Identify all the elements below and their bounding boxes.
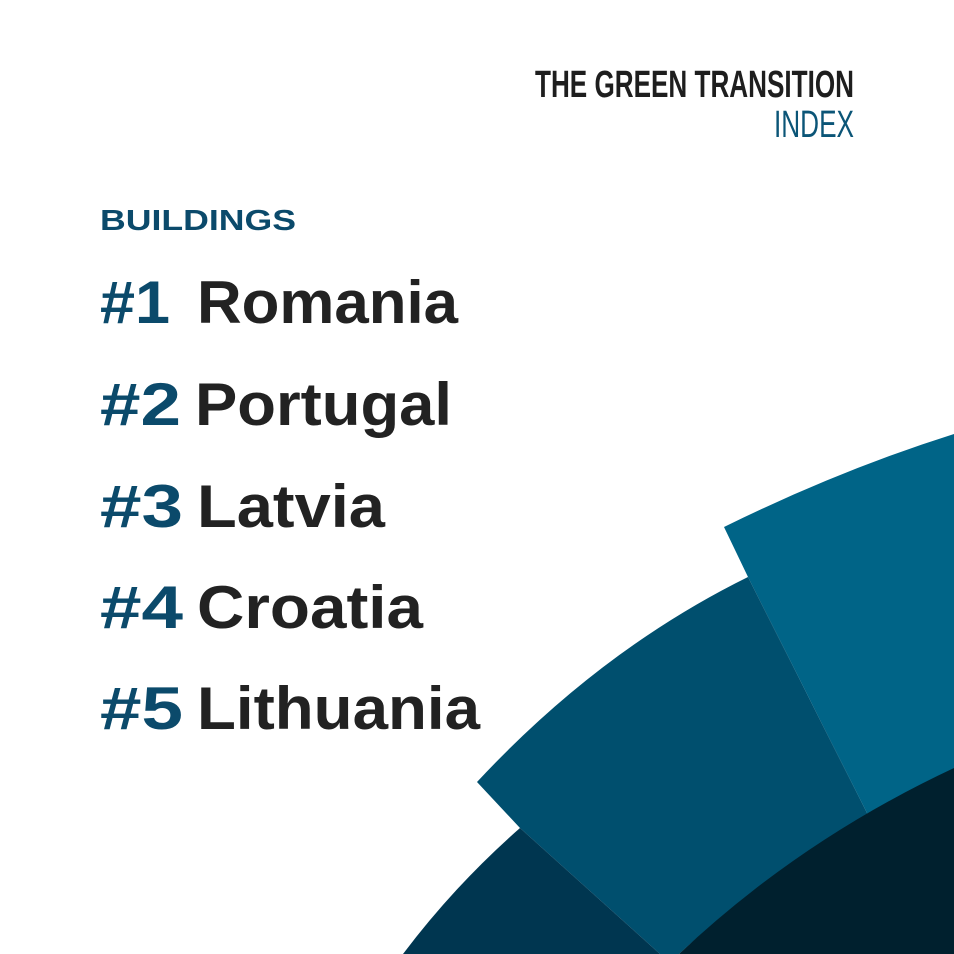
- rank 5: #5: [100, 675, 183, 742]
- heading: buildings: BUILDINGS: [100, 205, 296, 237]
- rank 3: #3: [100, 473, 183, 540]
- rank 4: #4: [100, 574, 184, 641]
- rank 5: Lithuania: [197, 675, 481, 742]
- rank 4: [100, 574, 424, 641]
- title: INDEX: [774, 104, 854, 146]
- ranking list: [100, 269, 481, 742]
- rank 2: [100, 371, 452, 438]
- rank 2: #2: [100, 371, 181, 438]
- arc segment: darkest: [679, 768, 954, 954]
- decorative arc segments: [403, 434, 954, 954]
- title: [535, 64, 854, 146]
- rank 1: #1: [100, 269, 170, 336]
- rank 3: Latvia: [197, 473, 386, 540]
- rank 3: [100, 473, 386, 540]
- rank 1: Romania: [197, 269, 459, 336]
- arc segment: light: [724, 434, 954, 825]
- arc segment: dark: [403, 828, 660, 954]
- rank 4: Croatia: [197, 574, 424, 641]
- rank 2: Portugal: [195, 371, 452, 438]
- arc segment: medium: [477, 577, 873, 954]
